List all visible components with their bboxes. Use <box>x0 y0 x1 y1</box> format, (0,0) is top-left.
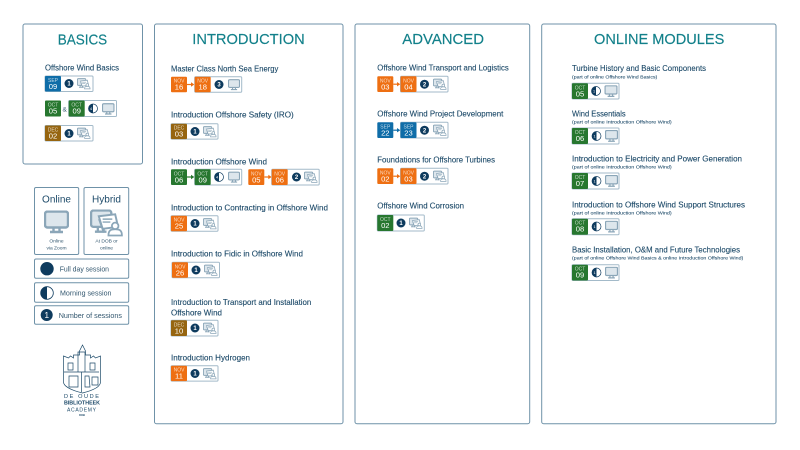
course: Introduction to Electricity and Power Generation: 07 <box>576 179 584 188</box>
legend: hybrid: Hybrid <box>92 195 121 206</box>
course: Offshore Wind Corrosion: 1 <box>399 221 403 227</box>
heading: introduction: INTRODUCTION <box>192 32 305 48</box>
heading: basics: BASICS <box>58 32 107 48</box>
course: Introduction to Fidic in Offshore Wind <box>171 249 303 278</box>
course: Offshore Wind Corrosion <box>377 200 464 231</box>
course: Introduction to Fidic in Offshore Wind: 26 <box>176 268 184 277</box>
course: Introduction Offshore Wind: 4 <box>216 176 218 180</box>
course: Basic Installation, O&M and Future Technologies <box>572 245 744 280</box>
course: Basic Installation, O&M and Future Technologies: Basic Installation, O&M and Future Technologies <box>572 245 740 255</box>
course: Introduction Offshore Wind: 09 <box>198 175 207 184</box>
course: Master Class North Sea Energy <box>171 64 279 92</box>
legend: hybrid <box>84 188 129 254</box>
panel: introduction <box>154 24 343 424</box>
course: Offshore Wind Transport and Logistics: 04 <box>404 82 413 91</box>
course: Introduction to Transport and Installation Offshore Wind: DEC <box>174 322 185 328</box>
course: Offshore Wind Project Development <box>377 109 504 138</box>
course: Introduction Hydrogen <box>171 352 250 381</box>
course: Basic Installation, O&M and Future Technologies: (part of online Offshore Wind Basics & online Introduction Offshore Wind) <box>572 256 744 262</box>
legend: number of sessions <box>34 306 129 324</box>
course: Introduction to Electricity and Power Generation: 1 <box>593 180 596 184</box>
logo: De Oude Bibliotheek Academy: DE OUDE <box>64 394 99 400</box>
course: Introduction to Contracting in Offshore Wind <box>171 203 328 231</box>
course: Introduction to Electricity and Power Generation: Introduction to Electricity and Power Generation <box>572 154 742 164</box>
legend: full day session <box>34 259 129 278</box>
legend: morning session <box>34 283 129 302</box>
legend: online <box>34 188 79 254</box>
course: Foundations for Offshore Turbines: NOV <box>380 170 391 176</box>
course: Foundations for Offshore Turbines <box>377 155 495 184</box>
logo: De Oude Bibliotheek Academy <box>64 345 100 417</box>
course: Offshore Wind Transport and Logistics: 2 <box>423 82 427 88</box>
course: Introduction to Fidic in Offshore Wind: 1 <box>194 268 198 274</box>
course: Wind Essentials: (part of online Introduction Offshore Wind) <box>572 119 672 125</box>
course: Introduction Offshore Wind: 05 <box>252 175 261 184</box>
course: Introduction Offshore Wind: Introduction Offshore Wind <box>171 156 267 166</box>
course: Offshore Wind Basics: SEP <box>48 78 59 84</box>
course: Foundations for Offshore Turbines: Foundations for Offshore Turbines <box>377 155 495 165</box>
course: Introduction to Electricity and Power Generation <box>572 154 742 189</box>
logo: De Oude Bibliotheek Academy: BIBLIOTHEEK <box>64 401 100 407</box>
panel: advanced <box>355 24 530 424</box>
course: Introduction to Fidic in Offshore Wind: NOV <box>175 264 186 270</box>
course: Offshore Wind Basics: OCT <box>71 102 82 108</box>
course: Introduction to Electricity and Power Generation: OCT <box>575 175 585 181</box>
course: Offshore Wind Basics: DEC <box>48 128 59 134</box>
course: Offshore Wind Project Development: SEP <box>380 124 391 130</box>
course: Master Class North Sea Energy: NOV <box>174 79 185 85</box>
heading: online modules: ONLINE MODULES <box>594 32 724 48</box>
course: Foundations for Offshore Turbines: 2 <box>423 174 427 180</box>
course: Introduction Offshore Wind: 06 <box>275 175 284 184</box>
course: Turbine History and Basic Components: OCT <box>575 85 585 91</box>
course: Offshore Wind Transport and Logistics: NOV <box>380 78 391 84</box>
heading: advanced: ADVANCED <box>402 32 484 48</box>
course: Introduction to Transport and Installation Offshore Wind: 10 <box>175 326 183 335</box>
course: Introduction Offshore Safety (IRO): DEC <box>174 126 185 132</box>
course: Wind Essentials <box>572 108 672 144</box>
course: Foundations for Offshore Turbines: 03 <box>404 174 413 183</box>
course: Introduction to Fidic in Offshore Wind: Introduction to Fidic in Offshore Wind <box>171 249 303 259</box>
course: Introduction to Transport and Installation Offshore Wind <box>171 297 312 336</box>
course: Turbine History and Basic Components: 05 <box>576 89 584 98</box>
course: Foundations for Offshore Turbines: NOV <box>403 170 415 176</box>
course: Offshore Wind Basics <box>45 62 119 141</box>
course: Offshore Wind Project Development: 22 <box>381 128 390 137</box>
course: Introduction Hydrogen: 1 <box>193 372 197 378</box>
course: Offshore Wind Basics: 1 <box>67 132 71 138</box>
course: Introduction to Contracting in Offshore Wind: 1 <box>193 222 197 228</box>
legend: full day session: Full day session <box>60 264 109 274</box>
course: Introduction to Offshore Wind Support Structures: (part of online Introduction Offshore Wind) <box>572 210 672 216</box>
course: Introduction to Contracting in Offshore Wind: Introduction to Contracting in Offshore Wind <box>171 203 328 213</box>
course: Master Class North Sea Energy: Master Class North Sea Energy <box>171 64 279 74</box>
course: Introduction Offshore Wind: NOV <box>251 171 262 177</box>
course: Introduction Offshore Wind: OCT <box>174 171 184 177</box>
course: Introduction Offshore Wind: 06 <box>175 175 183 184</box>
course: Introduction Offshore Wind: OCT <box>197 171 208 177</box>
course: Introduction Offshore Safety (IRO): 03 <box>175 130 183 139</box>
course: Introduction to Offshore Wind Support Structures: OCT <box>575 221 585 227</box>
course: Introduction Offshore Wind <box>171 156 319 185</box>
course: Offshore Wind Basics: 1 <box>67 82 71 88</box>
course: Offshore Wind Corrosion: OCT <box>380 217 391 223</box>
course: Offshore Wind Basics: 4 <box>90 107 92 111</box>
legend: number of sessions: Number of sessions <box>59 311 122 320</box>
course: Master Class North Sea Energy: NOV <box>197 79 209 85</box>
legend: number of sessions: 1 <box>44 310 49 320</box>
course: Introduction to Offshore Wind Support Structures <box>572 199 745 235</box>
panel: online modules <box>542 24 776 424</box>
panel: basics <box>23 24 142 164</box>
course: Foundations for Offshore Turbines: 02 <box>381 174 390 183</box>
course: Basic Installation, O&M and Future Technologies: 09 <box>576 271 584 280</box>
course: Introduction to Transport and Installation Offshore Wind: Offshore Wind <box>171 307 222 317</box>
course: Wind Essentials: 1 <box>593 134 596 138</box>
course: Offshore Wind Basics: 09 <box>72 106 81 116</box>
course: Offshore Wind Basics: & <box>62 106 68 114</box>
course: Offshore Wind Transport and Logistics: NOV <box>403 78 415 84</box>
course: Introduction Offshore Wind: 2 <box>295 175 299 181</box>
course: Turbine History and Basic Components <box>572 63 706 99</box>
course: Offshore Wind Transport and Logistics: Offshore Wind Transport and Logistics <box>377 63 509 73</box>
course: Turbine History and Basic Components: 1 <box>593 90 595 94</box>
course: Turbine History and Basic Components: Turbine History and Basic Components <box>572 63 706 73</box>
course: Wind Essentials: OCT <box>575 130 585 136</box>
course: Master Class North Sea Energy: 18 <box>198 83 207 92</box>
course: Turbine History and Basic Components: (part of online Offshore Wind Basics) <box>572 74 658 80</box>
course: Basic Installation, O&M and Future Technologies: OCT <box>575 267 585 273</box>
course: Offshore Wind Project Development: 23 <box>404 128 413 137</box>
course: Offshore Wind Project Development: Offshore Wind Project Development <box>377 109 504 119</box>
course: Introduction to Offshore Wind Support Structures: Introduction to Offshore Wind Support Structures <box>572 199 745 209</box>
course: Offshore Wind Project Development: 2 <box>423 128 427 134</box>
course: Introduction to Transport and Installation Offshore Wind: Introduction to Transport and Installation <box>171 297 312 307</box>
legend: online: Online <box>42 195 71 206</box>
legend: morning session: Morning session <box>60 289 112 298</box>
course: Offshore Wind Basics: 05 <box>49 106 57 116</box>
course: Offshore Wind Corrosion: 02 <box>381 221 390 230</box>
course: Introduction Hydrogen: 11 <box>175 372 183 381</box>
logo: De Oude Bibliotheek Academy: DOB <box>79 413 85 417</box>
course: Offshore Wind Project Development: SEP <box>403 124 414 130</box>
course: Introduction Offshore Safety (IRO): 1 <box>193 130 197 136</box>
course: Introduction Hydrogen: NOV <box>174 368 185 374</box>
legend: online: Online <box>49 238 64 244</box>
legend: hybrid: At DOB or <box>95 238 118 244</box>
course: Introduction to Contracting in Offshore Wind: 25 <box>175 222 183 231</box>
course: Master Class North Sea Energy: 16 <box>175 83 183 92</box>
course: Introduction to Offshore Wind Support Structures: 1 <box>593 225 596 229</box>
course: Offshore Wind Basics: 02 <box>49 132 57 140</box>
legend: hybrid: online <box>100 245 113 251</box>
course: Introduction Offshore Safety (IRO) <box>171 110 294 139</box>
course: Introduction to Transport and Installation Offshore Wind: 1 <box>193 326 197 332</box>
course: Introduction to Electricity and Power Generation: (part of online Introduction Offshore Wind) <box>572 165 672 171</box>
course: Offshore Wind Basics: OCT <box>48 102 58 108</box>
course: Introduction Offshore Wind: NOV <box>274 171 286 177</box>
course: Introduction to Offshore Wind Support Structures: 08 <box>576 225 584 234</box>
course: Offshore Wind Transport and Logistics <box>377 63 509 92</box>
course: Offshore Wind Basics: Offshore Wind Basics <box>45 62 119 72</box>
course: Wind Essentials: Wind Essentials <box>572 108 626 118</box>
course: Offshore Wind Transport and Logistics: 03 <box>381 82 390 91</box>
course: Introduction Offshore Safety (IRO): Introduction Offshore Safety (IRO) <box>171 110 294 120</box>
logo: De Oude Bibliotheek Academy: ACADEMY <box>67 408 97 414</box>
course: Wind Essentials: 06 <box>576 134 584 143</box>
course: Offshore Wind Corrosion: Offshore Wind Corrosion <box>377 200 464 210</box>
legend: online: via Zoom <box>46 245 67 251</box>
course: Master Class North Sea Energy: 3 <box>217 83 221 89</box>
course: Offshore Wind Basics: 09 <box>49 82 57 91</box>
course: Basic Installation, O&M and Future Technologies: 1 <box>593 271 596 275</box>
course: Introduction to Contracting in Offshore Wind: NOV <box>174 218 185 224</box>
course: Introduction Hydrogen: Introduction Hydrogen <box>171 352 250 362</box>
